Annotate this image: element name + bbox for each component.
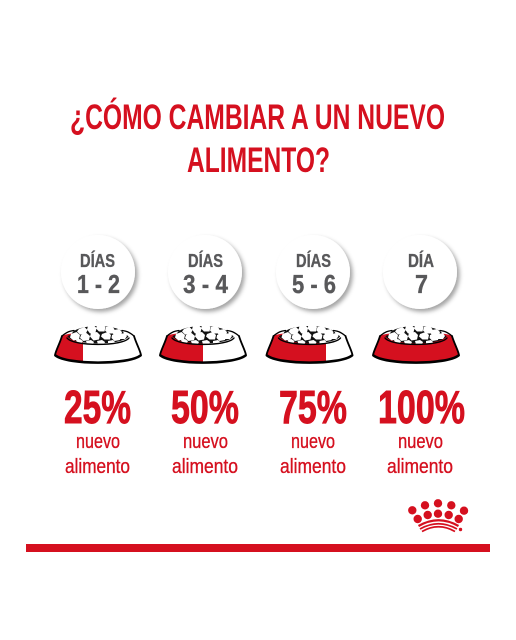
caption nuevo alimento: alimento bbox=[280, 456, 346, 478]
day badge 1-2 bbox=[61, 235, 135, 309]
icon: bowl 100% red bbox=[372, 324, 460, 366]
day badge 1-2: DÍAS bbox=[80, 250, 115, 271]
column: días 5-6 bbox=[266, 235, 354, 478]
caption nuevo alimento bbox=[387, 431, 453, 478]
caption nuevo alimento: nuevo bbox=[76, 431, 120, 453]
day badge 5-6: 5 - 6 bbox=[292, 269, 336, 299]
percentage 100%: 100% bbox=[378, 381, 465, 433]
caption nuevo alimento: alimento bbox=[65, 456, 130, 478]
day badge 3-4: 3 - 4 bbox=[183, 269, 228, 299]
icon: bowl 75% red bbox=[266, 324, 354, 366]
day badge 7 bbox=[383, 235, 457, 309]
day badge 5-6 bbox=[276, 235, 350, 309]
title: ALIMENTO? bbox=[187, 141, 330, 180]
caption nuevo alimento bbox=[172, 431, 238, 478]
caption nuevo alimento bbox=[280, 431, 346, 478]
day badge 3-4 bbox=[168, 235, 242, 309]
caption nuevo alimento: alimento bbox=[172, 456, 238, 478]
day badge 3-4: DÍAS bbox=[188, 250, 223, 271]
column: día 7 bbox=[372, 235, 465, 478]
caption nuevo alimento: alimento bbox=[387, 456, 453, 478]
day badge 1-2: 1 - 2 bbox=[77, 269, 120, 299]
column: días 3-4 bbox=[159, 235, 247, 478]
infographic bbox=[26, 98, 490, 552]
caption nuevo alimento: nuevo bbox=[291, 431, 335, 453]
percentage 50%: 50% bbox=[171, 381, 239, 433]
percentage 75%: 75% bbox=[279, 381, 347, 433]
logo: royal canin crown bbox=[408, 499, 468, 532]
day badge 5-6: DÍAS bbox=[296, 250, 331, 271]
percentage 25%: 25% bbox=[64, 381, 131, 433]
title bbox=[70, 97, 445, 180]
caption nuevo alimento: nuevo bbox=[183, 431, 228, 453]
day badge 7: 7 bbox=[415, 269, 428, 299]
column: días 1-2 bbox=[54, 235, 142, 478]
day badge 7: DÍA bbox=[408, 250, 434, 271]
caption nuevo alimento bbox=[65, 431, 130, 478]
caption nuevo alimento: nuevo bbox=[398, 431, 443, 453]
icon: bowl 25% red bbox=[54, 324, 142, 366]
footer bar bbox=[26, 544, 490, 552]
icon: bowl 50% red bbox=[159, 324, 247, 366]
